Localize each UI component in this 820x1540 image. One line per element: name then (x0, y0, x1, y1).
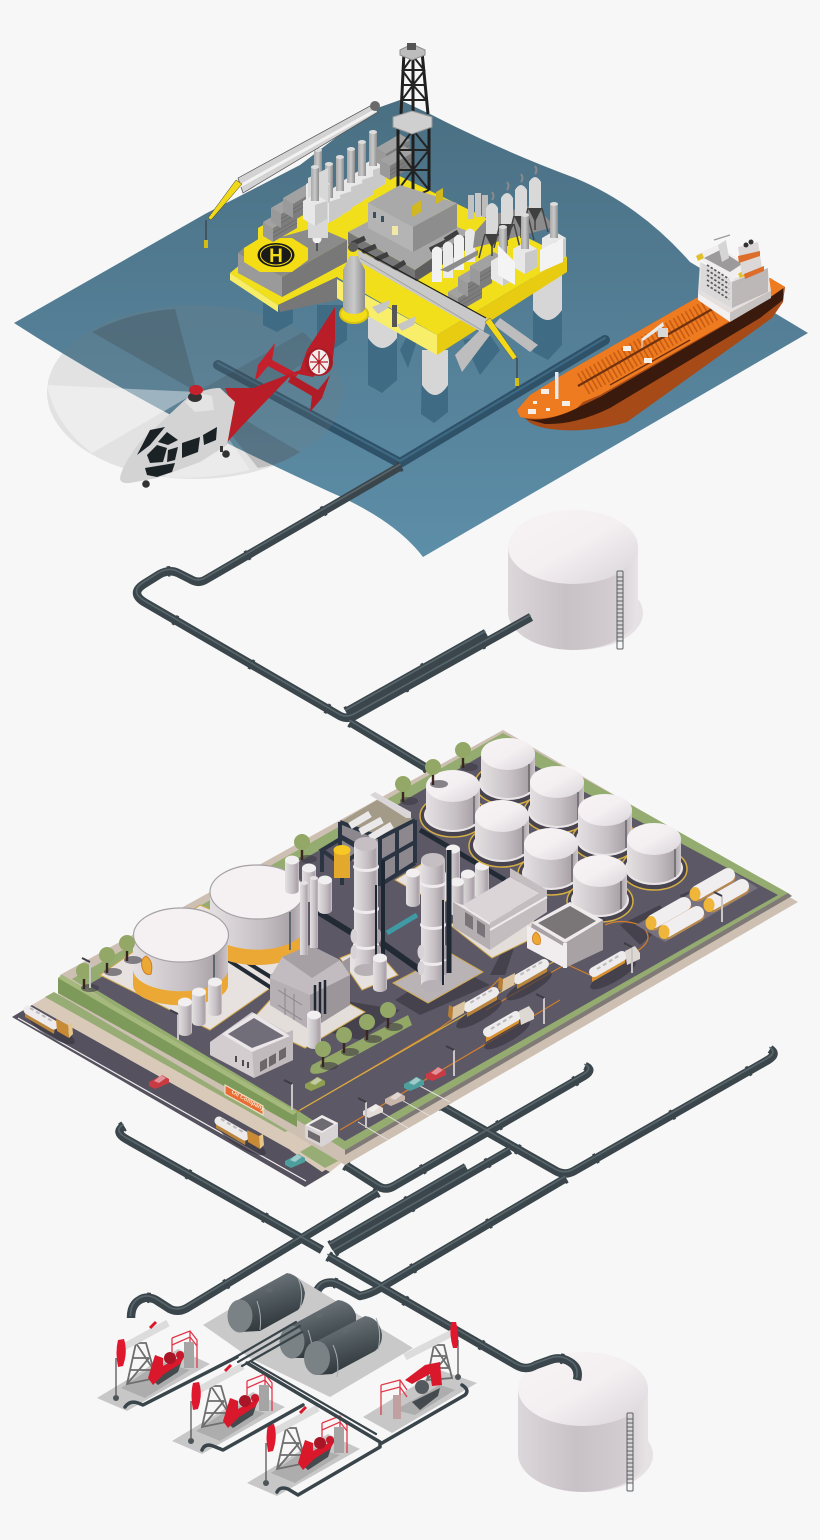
helicopter (120, 307, 335, 488)
steel frame rack (322, 792, 415, 886)
oil platform (204, 43, 567, 423)
concrete pads (100, 862, 550, 1048)
light poles (82, 892, 722, 1128)
cyan process pipe (387, 915, 417, 933)
cockpit glass (137, 427, 178, 477)
refinery ground (58, 730, 798, 1165)
lifeboats (372, 300, 416, 331)
storage tank: refinery front large (133, 908, 228, 1005)
undersea pipeline (218, 338, 605, 463)
sign text: Oil Company (230, 1090, 266, 1113)
rotor hub (185, 385, 214, 412)
tail boom and fins (222, 307, 335, 448)
field gathering pipes (125, 1322, 467, 1495)
pump jack 3 (247, 1407, 360, 1496)
helicopter rotor disc (47, 305, 343, 479)
containers (263, 184, 504, 312)
platform legs (263, 270, 562, 423)
rig deck (230, 170, 567, 355)
tanker trucks (25, 946, 640, 1160)
vessel pad (203, 1273, 413, 1397)
cylinders front (178, 954, 387, 1049)
domed storage tanks (420, 738, 687, 922)
dark process pipes (228, 830, 505, 1000)
gas turbine stacks (303, 130, 414, 238)
windows (167, 427, 217, 462)
helideck block (238, 227, 347, 297)
right crane (348, 242, 519, 388)
boiler building (270, 876, 350, 1030)
ground shadows (320, 878, 745, 1040)
helipad letter: H (269, 246, 283, 267)
storage tank: lower (518, 1352, 653, 1492)
cars (149, 1067, 446, 1168)
distillation column: right (418, 853, 448, 992)
panel: offshore scene (14, 43, 808, 557)
storage tank: upper (508, 510, 643, 650)
deck fittings (528, 322, 668, 414)
white cylinders (432, 228, 478, 282)
ship deck (517, 278, 785, 419)
pump jack 1 (97, 1322, 210, 1411)
left crane (204, 101, 380, 248)
ship hull (517, 278, 785, 430)
fuselage (120, 388, 235, 483)
deck ribs (578, 308, 714, 386)
median strip (310, 1015, 412, 1074)
central module (348, 185, 475, 282)
gas vessel: middle (280, 1300, 356, 1358)
gas station canopy (527, 902, 603, 968)
gatehouse (305, 1115, 338, 1147)
road markings (297, 922, 648, 1140)
derrick (393, 43, 432, 197)
pump jack 4 (363, 1322, 477, 1433)
separator silos platform (468, 166, 566, 286)
small frame with yellow vessel (322, 838, 362, 885)
trees (76, 742, 478, 1070)
storage tank: refinery rear large (210, 865, 304, 965)
helipad (244, 238, 308, 272)
distillation column: left (350, 837, 382, 976)
pipeline: offshore to refinery (136, 464, 531, 769)
hull dark band (522, 288, 783, 424)
small cylinders rear (285, 844, 489, 916)
pedestal tower (340, 256, 368, 323)
ship superstructure (695, 235, 771, 322)
entrance sign (225, 1085, 266, 1115)
warehouse (453, 868, 547, 950)
panel: oil field (97, 1273, 477, 1496)
gas vessel: rear (228, 1273, 305, 1332)
gas vessel: front (304, 1316, 382, 1377)
control building (210, 1012, 293, 1078)
road (12, 992, 345, 1187)
pipeline: lower network (119, 1047, 774, 1380)
water surface (14, 100, 808, 557)
tanker ship (517, 235, 785, 430)
landing gear (142, 446, 230, 488)
panel: refinery (12, 730, 798, 1187)
horizontal white tanks (636, 870, 758, 942)
hedge (58, 975, 297, 1127)
pump jack 2 (172, 1365, 285, 1454)
column risers (376, 850, 449, 985)
